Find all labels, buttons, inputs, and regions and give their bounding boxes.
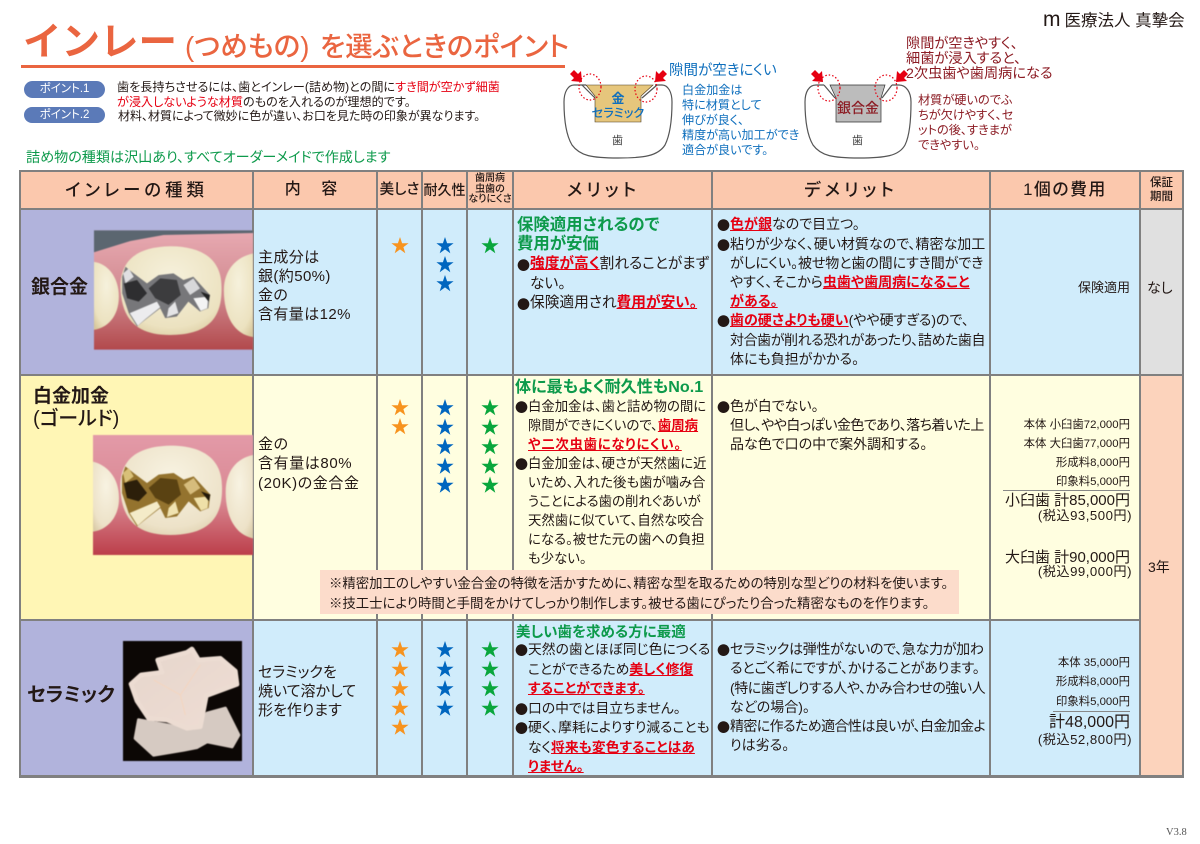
version label: V3.8: [1166, 827, 1187, 838]
name: silver alloy: 銀合金: [31, 277, 88, 298]
text: ceramic composition: [258, 664, 356, 718]
title: を選ぶときのポイント: [320, 31, 569, 62]
demerit list: gold: 色が白でない。: [730, 398, 819, 414]
row: ceramic: [21, 621, 1139, 775]
merit heading: ceramic: 美しい歯を求める方に最適: [516, 625, 686, 641]
table header row: 1個の費用: [1023, 180, 1107, 199]
demerit list: silver: がしにくい。被せ物と歯の間にすき間ができ: [730, 255, 983, 271]
demerit list: ceramic: ●: [717, 717, 729, 736]
merit list: silver: ●: [517, 294, 530, 313]
text: gold composition: 金の: [258, 436, 289, 452]
cost totals: gold: [1003, 490, 1130, 581]
demerit list: silver: 粘りが少なく、硬い材質なので、精密な加工: [730, 236, 985, 252]
demerit list: silver: ●: [717, 235, 730, 254]
label: gap warning: [906, 36, 1053, 82]
table header row: [21, 172, 1182, 208]
demerit list: gold: 品な色で口の中で案外調和する。: [730, 436, 927, 452]
cost breakdown: ceramic: 印象料5,000円: [1056, 696, 1130, 708]
demerit list: silver: ●: [717, 215, 730, 234]
rating: beauty: [392, 237, 408, 254]
text: silver composition: [258, 248, 351, 322]
merit list: gold: になる。被せた元の歯への負担: [528, 532, 705, 547]
diagram: silver alloy inlay: 銀合金: [837, 100, 879, 116]
callout: precision notes: ※精密加工のしやすい金合金の特徴を活かすために、精密な型を取るための特別な型どりの材料を使います。: [329, 576, 948, 591]
warranty cell: gold and ceramic: [1141, 376, 1182, 775]
merit list: ceramic: ことができるため美しく修復: [528, 662, 693, 676]
name: gold alloy: (ゴールド): [33, 408, 119, 430]
cost total: ceramic: (税込52,800円): [1038, 732, 1132, 747]
table header row: なりにくさ: [468, 194, 512, 205]
label: gap warning: 2次虫歯や歯周病になる: [906, 66, 1053, 82]
merit: silver: 費用が安価: [517, 235, 599, 253]
rating: decay resistance: [482, 399, 498, 493]
row: silver alloy: [21, 210, 1182, 374]
table header row: 耐久性: [424, 182, 466, 198]
text: silver composition: 主成分は: [258, 248, 320, 266]
text: gold composition: 含有量は80%: [258, 455, 352, 472]
cost breakdown: gold: 本体 小臼歯72,000円: [1024, 418, 1130, 430]
demerit list: silver: 体にも負担がかかる。: [730, 351, 859, 367]
table header row: デメリット: [804, 180, 898, 200]
text: gold benefits: 特に材質として: [682, 98, 762, 112]
text: silver drawbacks: ちが欠けやすく、セ: [918, 108, 1013, 122]
cost totals: gold: (税込99,000円): [1038, 564, 1132, 579]
text: silver composition: 銀(約50%): [258, 268, 331, 284]
label: gap resistant: 隙間が空きにくい: [669, 63, 777, 79]
cost breakdown: ceramic: 形成料8,000円: [1056, 676, 1130, 688]
cost breakdown: gold: 印象料5,000円: [1056, 476, 1130, 488]
merit list: silver: 強度が高く割れることがまず: [530, 256, 709, 272]
name: gold alloy: [33, 386, 119, 430]
demerit list: ceramic: [717, 640, 986, 753]
merit list: ceramic: ●: [515, 698, 528, 718]
demerit list: gold: 但し、やや白っぽい金色であり、落ち着いた上: [730, 417, 984, 433]
merit list: gold: 隙間ができにくいので、歯周病: [528, 418, 698, 433]
photo: silver inlay: [93, 230, 254, 350]
table header row: 保証: [1150, 177, 1173, 189]
badge: point 1: ポイント.1: [40, 83, 89, 95]
table header row: 歯周病: [475, 173, 505, 184]
label: gap warning: 細菌が浸入すると、: [906, 51, 1021, 67]
text: gold benefits: 伸びが良く、: [682, 113, 744, 127]
diagram: silver alloy inlay: [804, 70, 912, 159]
cost: silver: 保険適用: [1078, 280, 1130, 295]
text: point 1: 歯を長持ちさせるには、歯とインレー(詰め物)との間にすき間が空かず細菌: [117, 80, 500, 94]
merit list: gold: ●: [515, 396, 528, 416]
demerit list: ceramic: (特に歯ぎしりする人や、かみ合わせの強い人: [730, 680, 985, 696]
merit list: silver: ない。: [530, 276, 566, 292]
merit list: ceramic: 天然の歯とほぼ同じ色につくる: [528, 642, 710, 657]
merit list: gold: うことによる歯の削れぐあいが: [528, 494, 701, 509]
table header row: インレーの種類: [65, 180, 208, 200]
text: silver composition: 含有量は12%: [258, 306, 351, 322]
badge: point 2: [24, 107, 105, 123]
text: gold composition: (20K)の金合金: [258, 474, 360, 492]
organization name: m医療法人 真摯会: [1043, 8, 1185, 31]
text: gold benefits: 精度が高い加工ができ: [682, 128, 799, 142]
warranty cell: gold and ceramic: 3年: [1148, 559, 1170, 575]
text: gold benefits: [682, 83, 799, 157]
merit: silver: 保険適用されるので: [517, 216, 659, 234]
demerit list: silver: 歯の硬さよりも硬い(やや硬すぎる)ので、: [730, 312, 969, 328]
demerit list: gold: ●: [717, 396, 730, 416]
diagram: gold or ceramic inlay: 歯: [612, 135, 623, 147]
rating: durability: [436, 237, 454, 292]
table header row: 虫歯の: [475, 184, 505, 194]
merit list: silver: [517, 255, 709, 313]
text: point 1: [117, 80, 500, 109]
text: silver drawbacks: ットの後、すきまが: [918, 123, 1012, 137]
demerit list: silver: やすく、そこから虫歯や歯周病になること: [730, 274, 970, 290]
name: gold alloy: 白金加金: [33, 386, 109, 407]
badge: point 1: [24, 81, 105, 98]
demerit list: ceramic: りは劣る。: [730, 737, 789, 753]
merit list: ceramic: 口の中では目立ちません。: [528, 700, 681, 716]
rating: decay resistance: [482, 237, 498, 254]
demerit list: silver: [717, 215, 985, 367]
merit list: gold: や二次虫歯になりにくい。: [528, 437, 682, 452]
diagram: gold or ceramic inlay: [563, 70, 673, 159]
merit list: ceramic: ●: [515, 718, 528, 737]
cost totals: gold: (税込93,500円): [1038, 508, 1132, 523]
merit list: ceramic: りません。: [528, 759, 584, 774]
cost breakdown: gold: 本体 大臼歯77,000円: [1024, 438, 1130, 450]
merit list: gold: も少ない。: [528, 551, 587, 566]
text: gold benefits: 白金加金は: [682, 83, 742, 97]
merit list: silver: ●: [517, 255, 530, 274]
demerit list: ceramic: 精密に作るため適合性は良いが、白金加金よ: [730, 718, 985, 734]
merit list: gold: [515, 396, 707, 566]
callout: precision notes: [320, 570, 959, 614]
table header row: メリット: [567, 180, 640, 200]
row: gold alloy: [21, 376, 1139, 619]
photo: gold inlay: [92, 434, 254, 556]
label: gap warning: 隙間が空きやすく、: [906, 36, 1018, 52]
name: ceramic: セラミック: [27, 684, 115, 706]
merit list: ceramic: [515, 640, 710, 774]
warranty: silver: なし: [1147, 280, 1173, 296]
demerit list: ceramic: ●: [717, 640, 730, 659]
text: ceramic composition: セラミックを: [258, 664, 337, 680]
merit list: gold: いため、入れた後も歯が噛み合: [528, 475, 705, 490]
merit list: silver: 保険適用され費用が安い。: [530, 295, 697, 311]
table header row: 内 容: [285, 181, 345, 198]
demerit list: ceramic: セラミックは弾性がないので、急な力が加わ: [730, 641, 984, 657]
cost breakdown: ceramic: 本体 35,000円: [1058, 657, 1130, 669]
text: silver drawbacks: できやすい。: [918, 138, 980, 152]
text: silver drawbacks: [918, 93, 1013, 152]
rating: durability: [436, 641, 454, 716]
title: [21, 21, 569, 68]
cost totals: gold: 大臼歯 計90,000円: [1005, 549, 1130, 566]
merit list: ceramic: することができます。: [528, 681, 645, 696]
text: gold composition: [258, 436, 360, 492]
text: ceramic composition: 焼いて溶かして: [258, 682, 356, 700]
demerit list: silver: 対合歯が削れる恐れがあったり、詰めた歯自: [730, 332, 985, 348]
merit list: gold: ●: [515, 454, 528, 473]
merit list: ceramic: なく将来も変色することはあ: [528, 740, 695, 754]
text: point 2: 材料、材質によって微妙に色が違い、お口を見た時の印象が異なります。: [118, 109, 480, 123]
table header row: 美しさ: [380, 182, 419, 198]
cost breakdown: gold: 形成料8,000円: [1056, 457, 1130, 469]
merit list: gold: 白金加金は、硬さが天然歯に近: [528, 456, 707, 471]
merit heading: gold: 体に最もよく耐久性もNo.1: [515, 378, 703, 396]
cost total: ceramic: [1053, 711, 1130, 748]
table header row: 期間: [1150, 191, 1173, 203]
text: gold benefits: 適合が良いです。: [682, 143, 768, 157]
diagram: gold or ceramic inlay: 金: [611, 91, 624, 106]
text: ceramic composition: 形を作ります: [258, 702, 342, 718]
merit list: gold: 天然歯に似ていて、自然な咬合: [528, 513, 704, 528]
merit: silver: [517, 216, 660, 253]
cost breakdown: gold: [1024, 418, 1130, 488]
rating: decay resistance: [482, 641, 498, 716]
text: point 1: が浸入しないような材質のものを入れるのが理想的です。: [117, 95, 411, 109]
demerit list: ceramic: などの場合)。: [730, 699, 810, 715]
text: silver composition: 金の: [258, 286, 288, 304]
diagram: silver alloy inlay: 歯: [852, 135, 863, 147]
cost breakdown: ceramic: [1056, 656, 1130, 708]
title: インレー: [23, 21, 177, 64]
rating: beauty: [392, 641, 408, 735]
text: silver drawbacks: 材質が硬いのでふ: [918, 93, 1012, 107]
merit list: ceramic: 硬く、摩耗によりすり減ることも: [528, 720, 710, 735]
comparison table frame: [19, 170, 1184, 778]
demerit list: silver: ●: [717, 311, 730, 330]
merit list: ceramic: ●: [515, 640, 528, 659]
callout: precision notes: ※技工士により時間と手間をかけてしっかり制作します。被せる歯にぴったり合った精密なものを作ります。: [329, 596, 929, 610]
rating: durability: [436, 399, 454, 493]
demerit list: ceramic: るとごく希にですが、かけることがあります。: [730, 660, 979, 676]
note: types of fillings: 詰め物の種類は沢山あり、すべてオーダーメイドで作成します: [26, 149, 391, 165]
demerit list: silver: がある。: [730, 293, 778, 309]
cost totals: gold: 小臼歯 計85,000円: [1005, 492, 1130, 509]
title: (つめもの): [185, 31, 309, 62]
diagram: gold or ceramic inlay: セラミック: [592, 106, 644, 120]
rating: beauty: [392, 399, 408, 434]
demerit list: silver: 色が銀なので目立つ。: [730, 216, 860, 232]
badge: point 2: ポイント.2: [40, 109, 89, 121]
cost total: ceramic: 計48,000円: [1049, 714, 1130, 731]
merit list: gold: 白金加金は、歯と詰め物の間に: [528, 398, 706, 414]
demerit list: gold: [717, 396, 984, 452]
photo: ceramic inlay: [122, 640, 243, 762]
